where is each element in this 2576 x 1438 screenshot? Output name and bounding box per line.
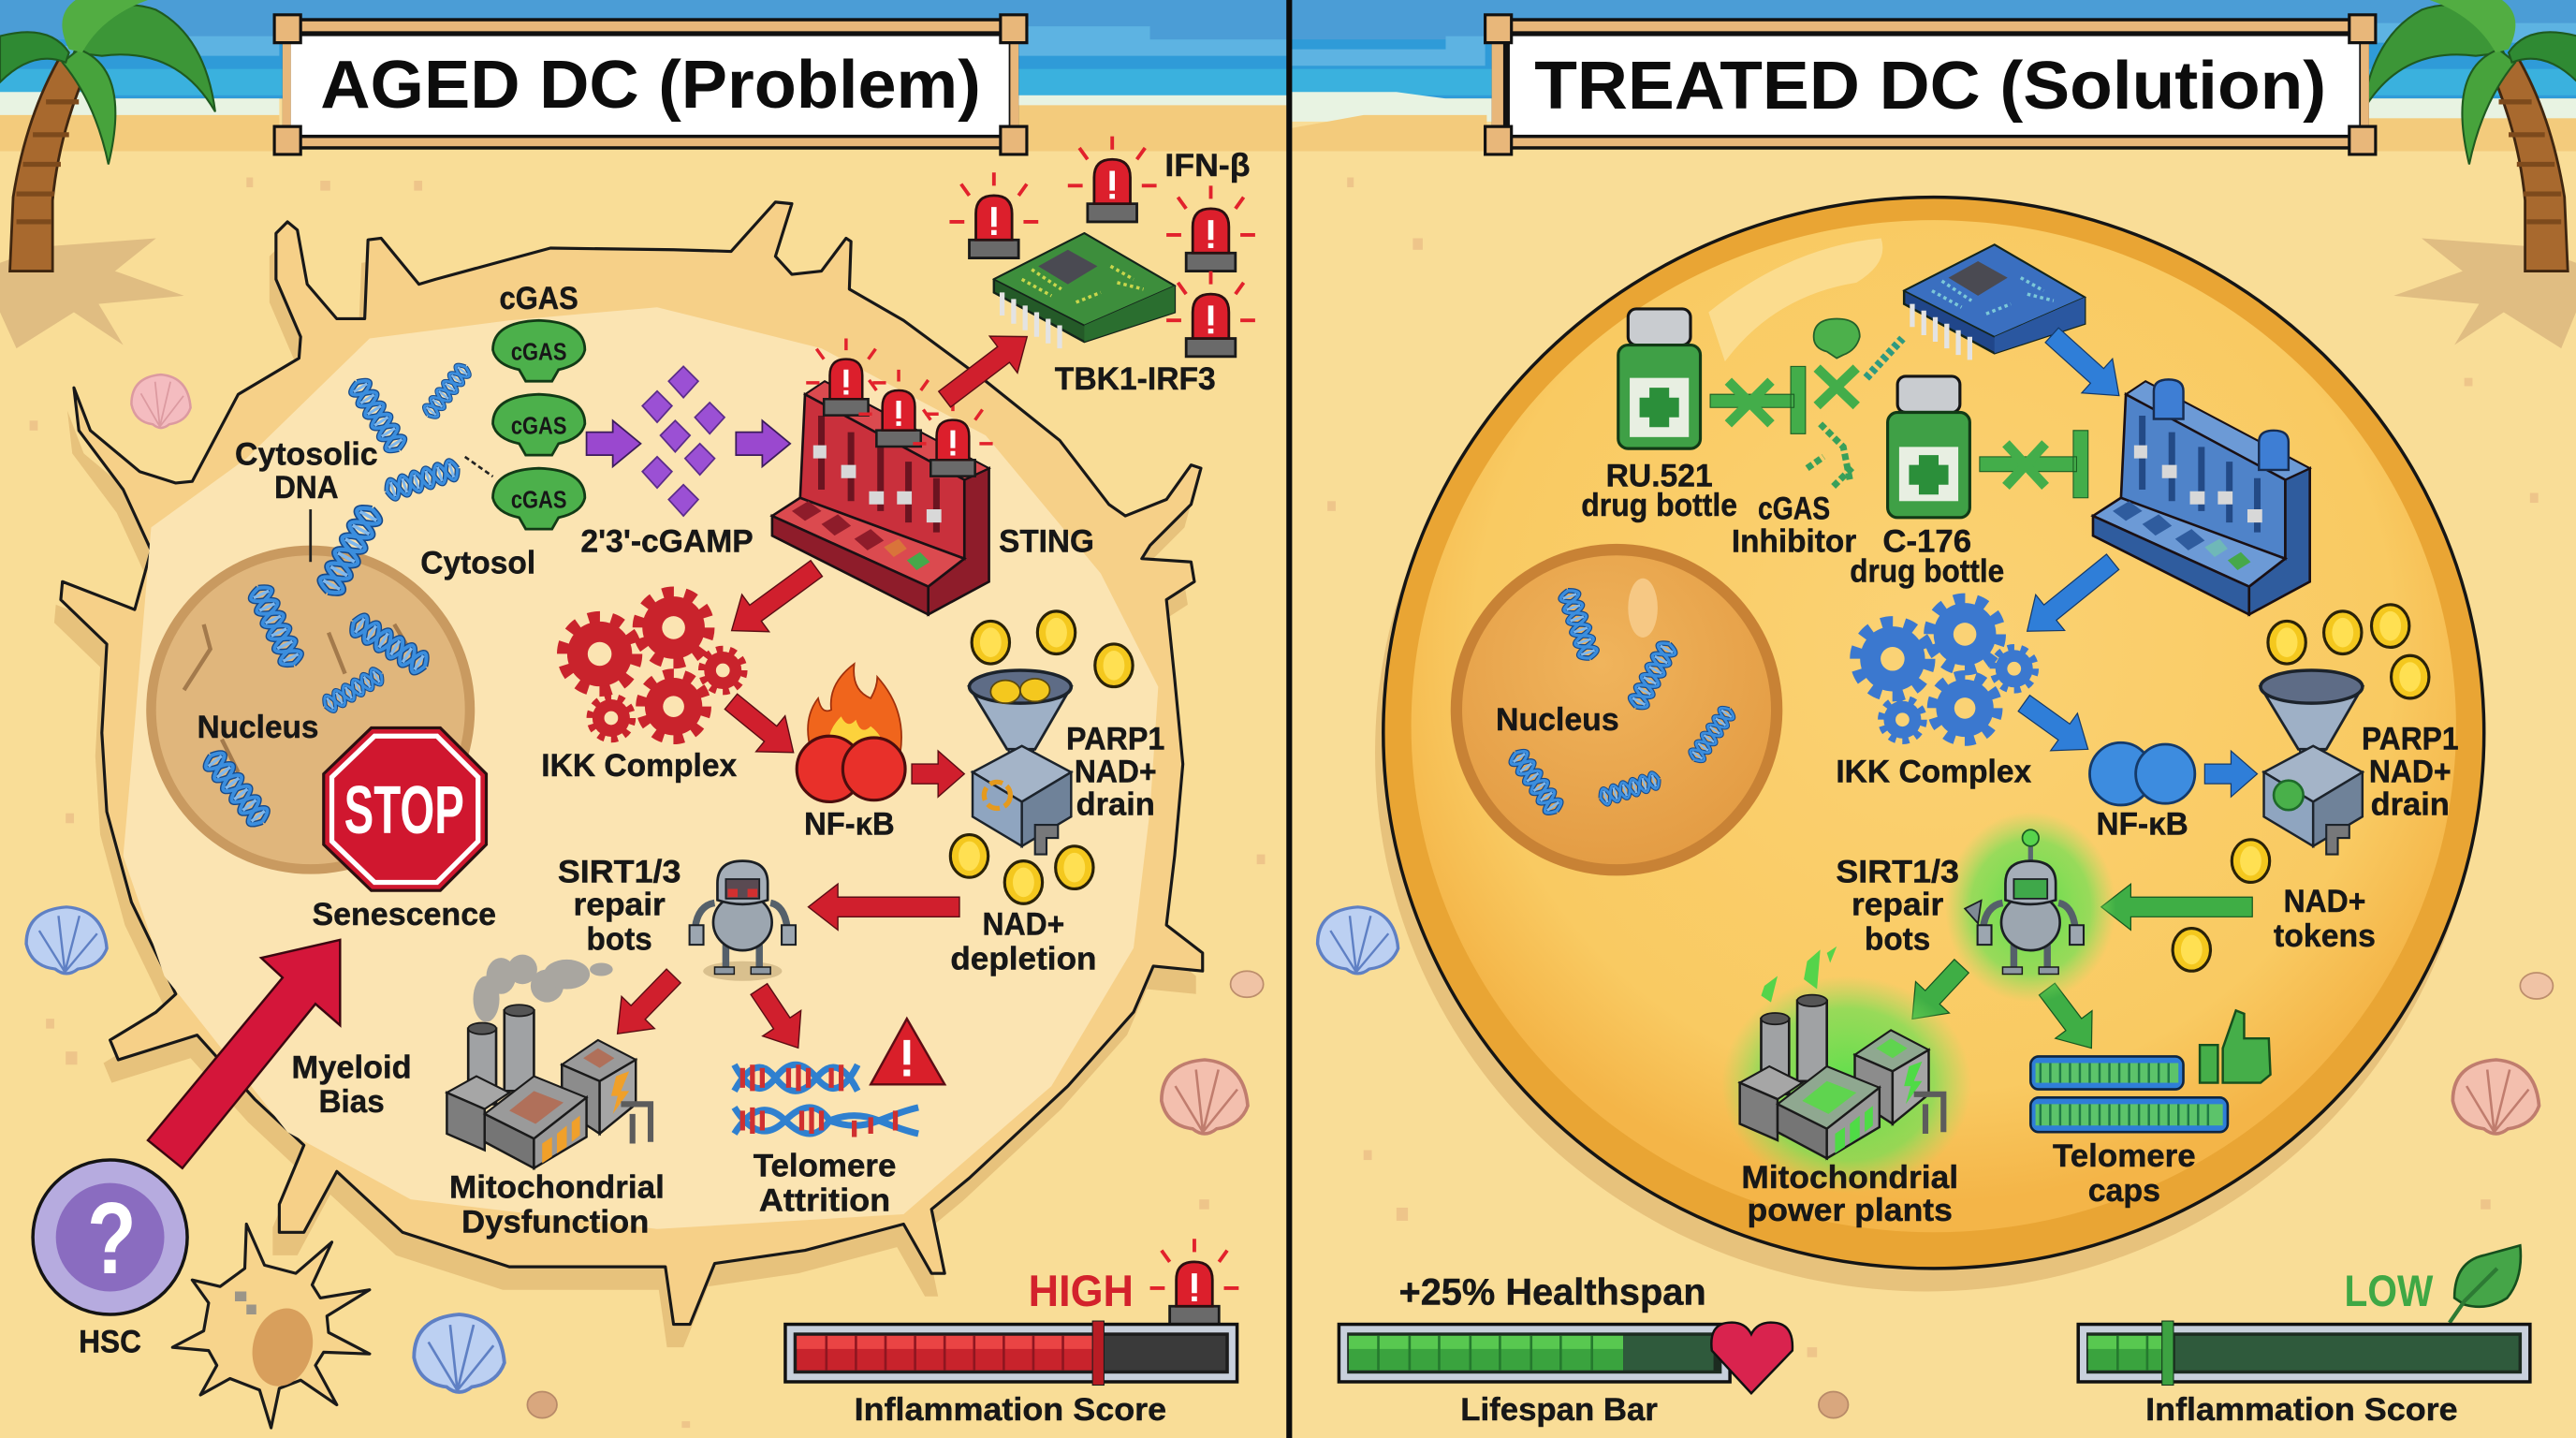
label: C-176 drug bottle: drug bottle <box>1850 553 2004 589</box>
label: Inflammation Score treated: Inflammation Score <box>2145 1392 2458 1428</box>
disabled cGAS and DNA fragments <box>1808 318 1902 486</box>
label: PARP1 NAD+ drain: drain <box>1076 786 1155 822</box>
SIRT robot aged <box>690 861 796 981</box>
label: Mitochondrial Dysfunction: Dysfunction <box>461 1204 649 1240</box>
label: Cytosolic DNA: Cytosolic <box>235 437 378 473</box>
NAD+ coins treated <box>2173 605 2429 971</box>
flame core <box>828 716 883 753</box>
cGAS enzymes: cGAS <box>511 411 567 439</box>
inhibitor symbol 1 <box>1710 366 1806 433</box>
red pathway arrows <box>601 318 1041 1061</box>
cGAS enzymes: cGAS <box>511 337 567 365</box>
label: Myeloid Bias: Myeloid <box>292 1049 412 1085</box>
cGAS enzymes <box>493 320 585 529</box>
warning triangle <box>871 1019 944 1084</box>
inactive blue chip <box>1904 244 2085 360</box>
HSC stem cell: ? <box>87 1181 137 1296</box>
label: C-176 drug bottle <box>1850 524 2004 589</box>
cytoplasm <box>124 307 1158 1229</box>
heart icon <box>1711 1323 1793 1393</box>
label: LOW: LOW <box>2345 1267 2434 1316</box>
damaged telomeres <box>735 1064 918 1137</box>
label: TBK1-IRF3: TBK1-IRF3 <box>1055 361 1216 397</box>
label: Telomere caps: caps <box>2088 1173 2160 1209</box>
IKK gears red <box>564 594 743 739</box>
stop sign: STOP <box>344 773 464 848</box>
label: Mitochondrial power plants <box>1741 1160 1958 1228</box>
label: Nucleus: Nucleus <box>198 710 318 745</box>
label: Myeloid Bias: Bias <box>318 1084 385 1120</box>
IFN-beta alarms <box>949 137 1255 357</box>
panel: aged dendritic cell <box>54 202 1203 1347</box>
label: Cytosolic DNA <box>235 437 378 506</box>
small sandy myeloid cell <box>172 1224 370 1428</box>
label: Telomere caps <box>2053 1138 2196 1209</box>
factory treated <box>1740 995 1943 1158</box>
label: Telomere Attrition: Telomere <box>754 1149 896 1184</box>
label: Telomere caps: Telomere <box>2053 1138 2196 1174</box>
NF-kB blue <box>2089 742 2195 805</box>
label: NAD+ depletion <box>950 907 1097 976</box>
highlight <box>1708 238 1882 361</box>
label: SIRT1/3 repair bots treated: repair <box>1852 888 1943 923</box>
label: PARP1 NAD+ drain: PARP1 <box>1066 721 1164 756</box>
label: Mitochondrial Dysfunction: Mitochondrial <box>449 1169 665 1205</box>
label: PARP1 NAD+ drain treated: PARP1 <box>2362 721 2459 756</box>
label: NAD+ depletion: depletion <box>950 941 1097 976</box>
label: IFN-beta: IFN-β <box>1164 148 1251 183</box>
cell membrane <box>61 202 1203 1325</box>
label: cGAS Inhibitor: cGAS <box>1758 492 1830 527</box>
PARP1 machine treated <box>2261 670 2363 855</box>
PARP1 machine aged <box>970 670 1071 855</box>
label: SIRT1/3 repair bots treated: SIRT1/3 <box>1836 854 1959 889</box>
purple arrows and cGAMP diamonds <box>587 366 790 516</box>
label: Inflammation Score aged: Inflammation Score <box>855 1392 1166 1428</box>
title banner: aged: AGED DC (Problem) <box>320 48 981 123</box>
label: C-176 drug bottle: C-176 <box>1882 524 1971 560</box>
label: SIRT1/3 repair bots treated: bots <box>1865 921 1930 957</box>
label: Cytosolic DNA: DNA <box>274 470 339 506</box>
inflammation bar high <box>783 1321 1238 1385</box>
label: 2'3'-cGAMP: 2'3'-cGAMP <box>580 524 754 560</box>
palm tree left <box>0 0 215 271</box>
nuclear DNA left <box>202 583 431 829</box>
label: PARP1 NAD+ drain treated <box>2362 721 2459 822</box>
IKK gears blue <box>1857 600 2034 740</box>
label: SIRT1/3 repair bots aged: bots <box>587 921 652 957</box>
cell shadow <box>54 225 1196 1347</box>
cGAS enzymes: cGAS <box>511 485 567 513</box>
SIRT robot treated with glow <box>1945 812 2116 1003</box>
label: SIRT1/3 repair bots aged: repair <box>574 888 666 923</box>
treated cell membrane <box>1383 198 2484 1269</box>
HSC stem cell <box>33 1160 187 1314</box>
green sparkles <box>1761 946 1837 1003</box>
inhibitor symbol 2 <box>1980 431 2088 498</box>
stop sign <box>324 727 487 890</box>
smoke <box>473 955 613 1022</box>
label: Lifespan Bar: Lifespan Bar <box>1460 1392 1658 1428</box>
label: SIRT1/3 repair bots aged: SIRT1/3 <box>558 854 681 889</box>
label: Telomere Attrition: Attrition <box>759 1182 890 1218</box>
label: cGAS: cGAS <box>500 281 578 316</box>
label: SIRT1/3 repair bots treated <box>1836 854 1959 957</box>
title banner: treated <box>1486 15 2376 154</box>
panel divider <box>1286 0 1292 1438</box>
label: Telomere Attrition <box>754 1149 896 1218</box>
C-176 drug bottle <box>1888 376 1969 518</box>
label: Cytosol: Cytosol <box>420 546 535 581</box>
myeloid bias arrow <box>148 940 340 1168</box>
label: Nucleus treated: Nucleus <box>1496 702 1619 738</box>
leaf icon <box>2450 1245 2521 1323</box>
label: Senescence: Senescence <box>312 897 496 932</box>
high alarm <box>1150 1239 1238 1325</box>
nuclear DNA treated <box>1508 588 1736 816</box>
label: PARP1 NAD+ drain <box>1066 721 1164 822</box>
label: RU.521 drug bottle: RU.521 <box>1606 458 1713 493</box>
label: PARP1 NAD+ drain treated: drain <box>2371 786 2450 822</box>
palm shadow right <box>2393 238 2576 348</box>
factory aged <box>446 1005 651 1168</box>
label: IKK Complex: IKK Complex <box>541 748 737 784</box>
title banner: treated: TREATED DC (Solution) <box>1534 49 2326 124</box>
label: cGAS Inhibitor <box>1732 492 1856 560</box>
inflammation bar low <box>2076 1321 2532 1385</box>
panel: treated dendritic cell <box>1375 198 2484 1291</box>
palm shadow left <box>0 238 184 348</box>
RU.521 drug bottle <box>1618 309 1701 448</box>
label: NAD+ tokens: NAD+ <box>2284 884 2365 919</box>
label: HSC: HSC <box>79 1324 141 1359</box>
label: NAD+ tokens: tokens <box>2274 918 2376 954</box>
label: PARP1 NAD+ drain treated: NAD+ <box>2369 754 2452 789</box>
label: RU.521 drug bottle: drug bottle <box>1581 488 1737 523</box>
background: ocean and sky <box>0 0 2576 151</box>
label: cGAS Inhibitor: Inhibitor <box>1732 524 1856 560</box>
label: SIRT1/3 repair bots aged <box>558 854 681 957</box>
label: HIGH: HIGH <box>1029 1267 1134 1316</box>
label: STING: STING <box>999 524 1094 560</box>
label: IKK Complex treated: IKK Complex <box>1836 754 2031 789</box>
treated cytoplasm <box>1412 220 2456 1232</box>
flame <box>808 664 901 753</box>
thumbs up icon <box>2200 1010 2271 1083</box>
shells and pebbles <box>26 374 2553 1418</box>
label: NAD+ tokens <box>2274 884 2376 954</box>
palm tree right <box>2363 0 2576 271</box>
label: Myeloid Bias <box>292 1049 412 1120</box>
title banner: aged <box>274 15 1027 154</box>
label: +25% Healthspan: +25% Healthspan <box>1398 1271 1706 1313</box>
TBK1-IRF3 chip <box>994 233 1175 348</box>
label: RU.521 drug bottle <box>1581 458 1737 523</box>
label: Mitochondrial Dysfunction <box>449 1169 665 1240</box>
telomere caps <box>2030 1056 2228 1132</box>
cytosolic DNA fragments <box>311 362 493 597</box>
label: Mitochondrial power plants: Mitochondrial <box>1741 1160 1958 1196</box>
nucleus treated <box>1451 544 1782 875</box>
NF-kB red <box>797 736 905 801</box>
factory glow treated <box>1721 976 1971 1193</box>
STING red console <box>772 339 993 614</box>
label: PARP1 NAD+ drain: NAD+ <box>1075 754 1157 789</box>
label: NF-kB: NF-κB <box>804 807 895 843</box>
blue and green pathway arrows <box>1895 318 2258 1062</box>
NAD+ coins aged <box>950 611 1133 903</box>
label: Mitochondrial power plants: power plants <box>1748 1193 1953 1228</box>
STING blue console <box>2093 379 2310 614</box>
label: NF-kB treated: NF-κB <box>2097 807 2188 843</box>
lifespan bar <box>1338 1323 1732 1384</box>
treated cell shadow <box>1375 213 2479 1291</box>
label: NAD+ depletion: NAD+ <box>983 907 1064 943</box>
nucleus left <box>146 546 475 874</box>
